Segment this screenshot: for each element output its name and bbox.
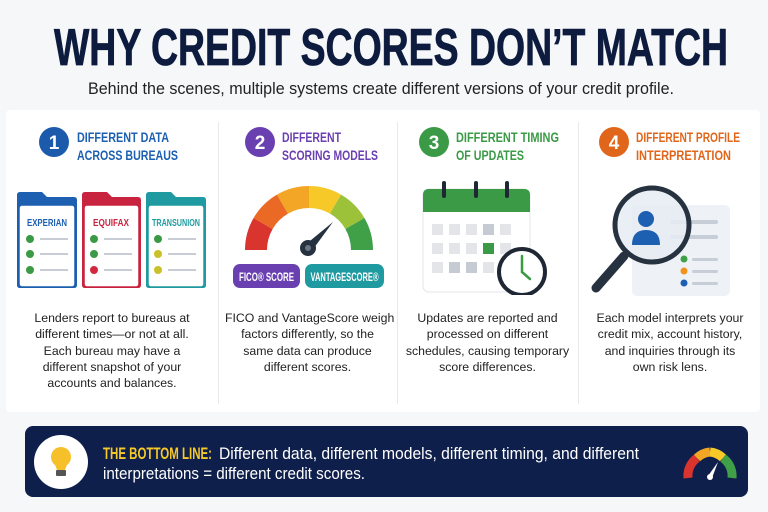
- text: panel 2: different scores.: [264, 360, 351, 374]
- pill FICO: [233, 264, 300, 288]
- icon: bureau folders: EXPERIAN: [27, 218, 67, 229]
- text: panel 4: own risk lens.: [633, 360, 707, 374]
- text: panel 4: credit mix, account history,: [598, 327, 742, 341]
- text: panel 1: different snapshot of your: [43, 360, 181, 374]
- icon: gauge with score pills: [233, 186, 384, 288]
- heading 1: ACROSS BUREAUS: [77, 148, 178, 163]
- icon: calendar with clock: [422, 181, 547, 295]
- text: panel 1: different times—or not at all.: [35, 327, 189, 341]
- pill FICO: FICO® SCORE: [239, 270, 294, 284]
- heading 2: DIFFERENT: [282, 130, 342, 145]
- text: panel 3: [406, 311, 570, 374]
- text: panel 2: same data can produce: [243, 344, 372, 358]
- text: panel 3: Updates are reported and: [417, 311, 558, 325]
- bottom line banner: [25, 426, 748, 497]
- text: panel 2: FICO and VantageScore weigh: [225, 311, 394, 325]
- heading 2: [245, 127, 378, 163]
- heading 2: SCORING MODELS: [282, 148, 378, 163]
- icon: bureau folders: [17, 192, 206, 288]
- text: panel 3: processed on different: [427, 327, 548, 341]
- heading 3: OF UPDATES: [456, 148, 524, 163]
- text: panel 4: Each model interprets your: [597, 311, 743, 325]
- heading 2: 2: [255, 133, 265, 154]
- icon: lightbulb: [34, 435, 88, 489]
- heading 4: 4: [609, 133, 620, 154]
- text: panel 4: and inquiries through its: [605, 344, 735, 358]
- text: panel 3: schedules, causing temporary: [406, 344, 569, 358]
- icon: bureau folders: EQUIFAX: [93, 218, 129, 229]
- text: panel 4: [597, 311, 744, 374]
- heading 1: DIFFERENT DATA: [77, 130, 169, 145]
- heading 3: 3: [429, 133, 439, 154]
- bottom text: THE BOTTOM LINE:: [103, 444, 212, 463]
- heading 4: [599, 127, 740, 163]
- text: panel 1: accounts and balances.: [47, 376, 177, 390]
- text: panel 2: [225, 311, 394, 374]
- bottom text: interpretations = different credit scores.: [103, 464, 365, 483]
- bottom text: [103, 444, 639, 483]
- heading 3: [419, 127, 559, 163]
- panels container: [6, 110, 760, 412]
- heading 1: [39, 127, 178, 163]
- icon: magnifier over profile: [592, 186, 730, 296]
- subtitle: Behind the scenes, multiple systems create different versions of your credit profile.: [88, 80, 674, 98]
- pill Vantage: [305, 264, 384, 288]
- bottom text: Different data, different models, different timing, and different: [219, 444, 639, 463]
- text: panel 3: score differences.: [439, 360, 536, 374]
- icon: small gauge: [683, 448, 737, 480]
- panel headings: [39, 127, 740, 163]
- text: panel 1: Lenders report to bureaus at: [34, 311, 190, 325]
- heading 4: INTERPRETATION: [636, 148, 731, 163]
- heading 1: 1: [49, 133, 60, 154]
- text: panel 2: factors differently, so the: [241, 327, 374, 341]
- text: panel 1: Each bureau may have a: [44, 344, 180, 358]
- text: panel 1: [34, 311, 190, 390]
- heading 3: DIFFERENT TIMING: [456, 130, 559, 145]
